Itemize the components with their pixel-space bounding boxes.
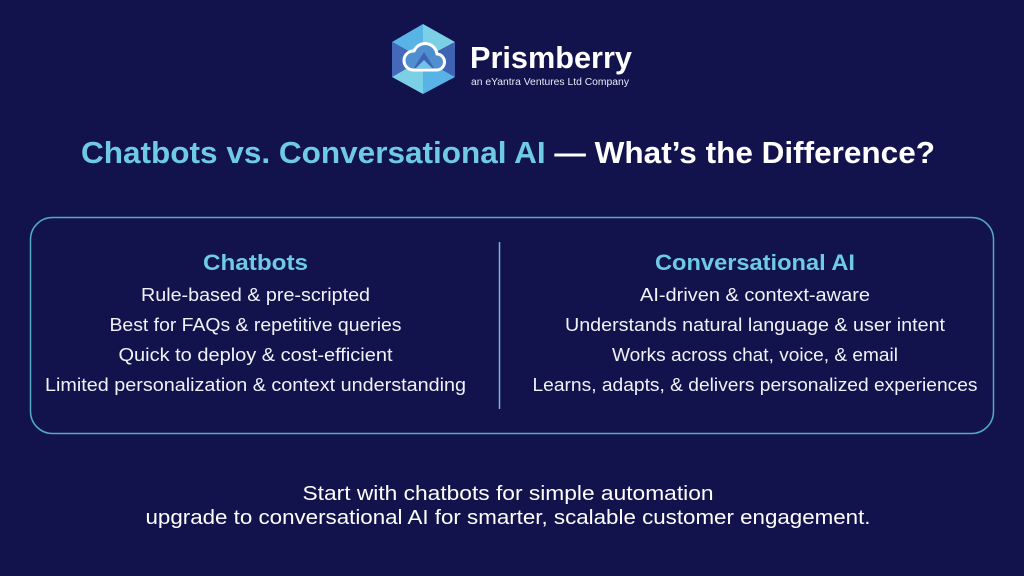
item: rule-based: Rule-based & pre-scripted bbox=[141, 285, 370, 305]
panel border bbox=[30, 218, 994, 434]
item: quick to deploy: Quick to deploy & cost-efficient bbox=[118, 345, 392, 365]
item: AI-driven: AI-driven & context-aware bbox=[640, 285, 870, 305]
item: limited personalization: Limited personalization & context understanding bbox=[45, 375, 466, 395]
title: Chatbots vs. Conversational AI — What’s the Difference? bbox=[81, 135, 935, 170]
logo wordmark: Prismberry bbox=[470, 40, 633, 75]
center divider bbox=[498, 242, 500, 409]
closing message bbox=[146, 482, 870, 529]
item: natural language: Understands natural language & user intent bbox=[565, 315, 945, 335]
item: best for FAQs: Best for FAQs & repetitive queries bbox=[110, 315, 402, 335]
item: channels: Works across chat, voice, & email bbox=[612, 345, 898, 365]
closing line 1: Start with chatbots for simple automation bbox=[302, 482, 714, 505]
panel: comparison bbox=[30, 218, 994, 434]
column: chatbots bbox=[45, 250, 466, 395]
logo tagline: an eYantra Ventures Ltd Company bbox=[471, 77, 629, 88]
column: conversational AI bbox=[532, 250, 978, 395]
item: learns: Learns, adapts, & delivers personalized experiences bbox=[532, 375, 978, 395]
heading: Conversational AI: Conversational AI bbox=[655, 250, 855, 275]
closing line 2: upgrade to conversational AI for smarter, scalable customer engagement. bbox=[146, 506, 870, 529]
logo: Prismberry bbox=[392, 24, 633, 94]
icon: hexagon with cloud bbox=[392, 24, 455, 94]
heading: Chatbots: Chatbots bbox=[203, 250, 308, 275]
